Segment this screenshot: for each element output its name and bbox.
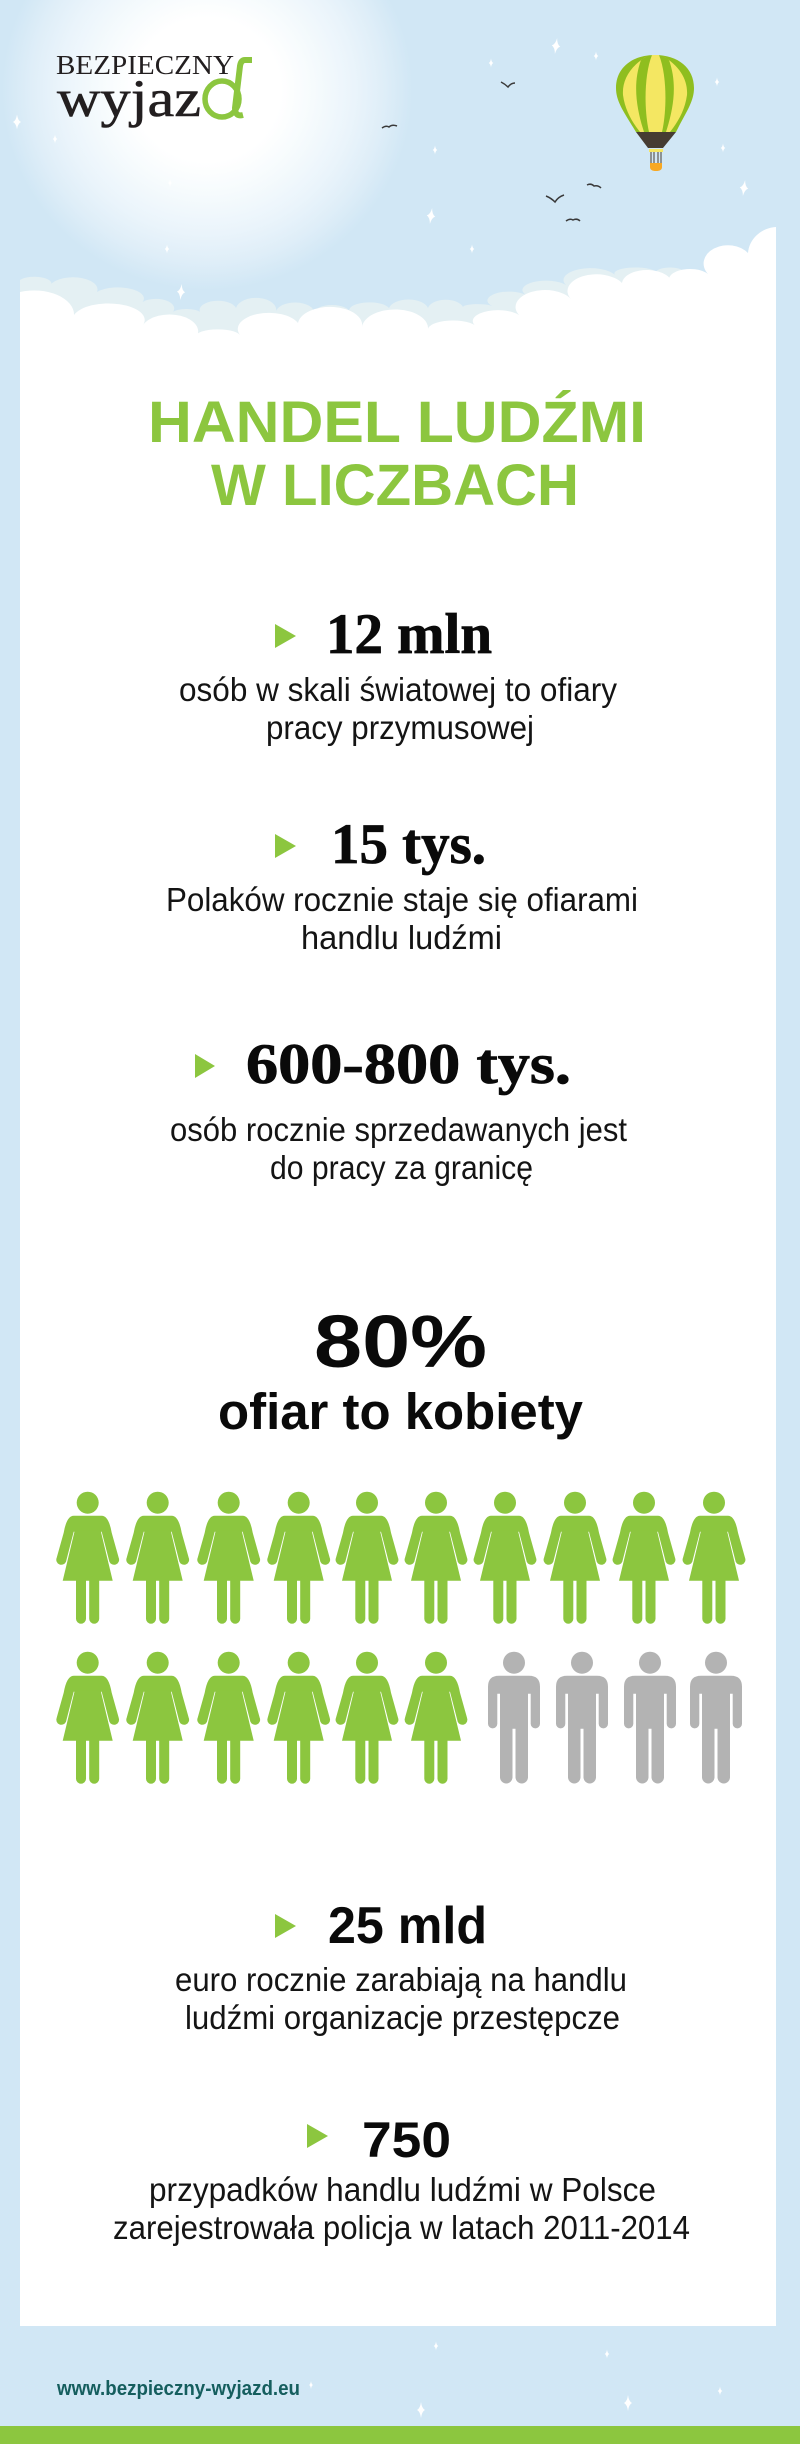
stat: 15 tys.: handlu ludźmi: [301, 919, 502, 956]
heading: 80% ofiar to kobiety: [218, 1300, 584, 1440]
stat: 25 mld: [175, 1897, 627, 2036]
stat: 600-800 tys.: osób rocznie sprzedawanych jest: [170, 1111, 627, 1148]
footer green bar: [0, 2426, 800, 2444]
sun glow: [2, 0, 412, 290]
stat: 750: [113, 2112, 690, 2246]
logo: Bezpieczny Wyjazd: [56, 50, 252, 128]
stat: 600-800 tys.: 600-800 tys.: [246, 1033, 571, 1096]
logo: Bezpieczny Wyjazd: wyjaz: [57, 70, 201, 128]
stat: 12 mln: [179, 603, 617, 746]
heading: 80% ofiar to kobiety: ofiar to kobiety: [218, 1383, 584, 1440]
stat: 25 mld: euro rocznie zarabiają na handlu: [175, 1961, 627, 1998]
title: W LICZBACH: [211, 453, 579, 518]
title: HANDEL LUDŹMI: [148, 390, 646, 455]
heading: 80% ofiar to kobiety: 80%: [314, 1300, 487, 1383]
stat: 25 mld: ludźmi organizacje przestępcze: [185, 1999, 620, 2036]
stat: 15 tys.: 15 tys.: [331, 813, 486, 876]
stat: 25 mld: 25 mld: [328, 1897, 487, 1955]
stat: 12 mln: osób w skali światowej to ofiary: [179, 671, 617, 708]
back clouds: [20, 267, 684, 360]
stat: 750: przypadków handlu ludźmi w Polsce: [149, 2171, 656, 2208]
footer url: www.bezpieczny-wyjazd.eu: [56, 2378, 300, 2400]
stars in the sky: [13, 37, 749, 300]
stat: 750: 750: [362, 2112, 451, 2168]
stat: 750: zarejestrowała policja w latach 2011-2014: [113, 2209, 690, 2246]
title: [148, 390, 646, 518]
stat: 600-800 tys.: [170, 1033, 627, 1186]
stat: 12 mln: pracy przymusowej: [266, 709, 534, 746]
stat: 15 tys.: [166, 813, 638, 956]
birds: [382, 82, 601, 221]
pictogram row 2: six women, four men: [56, 1652, 742, 1783]
stat: 15 tys.: Polaków rocznie staje się ofiarami: [166, 881, 638, 918]
stat: 600-800 tys.: do pracy za granicę: [270, 1149, 533, 1186]
stat: 12 mln: 12 mln: [326, 603, 492, 666]
pictogram row 1: ten women: [56, 1492, 745, 1619]
stars in the footer: [309, 2342, 722, 2418]
hot air balloon: [616, 55, 694, 171]
logo: Bezpieczny Wyjazd: BEZPIECZNY: [56, 50, 234, 80]
